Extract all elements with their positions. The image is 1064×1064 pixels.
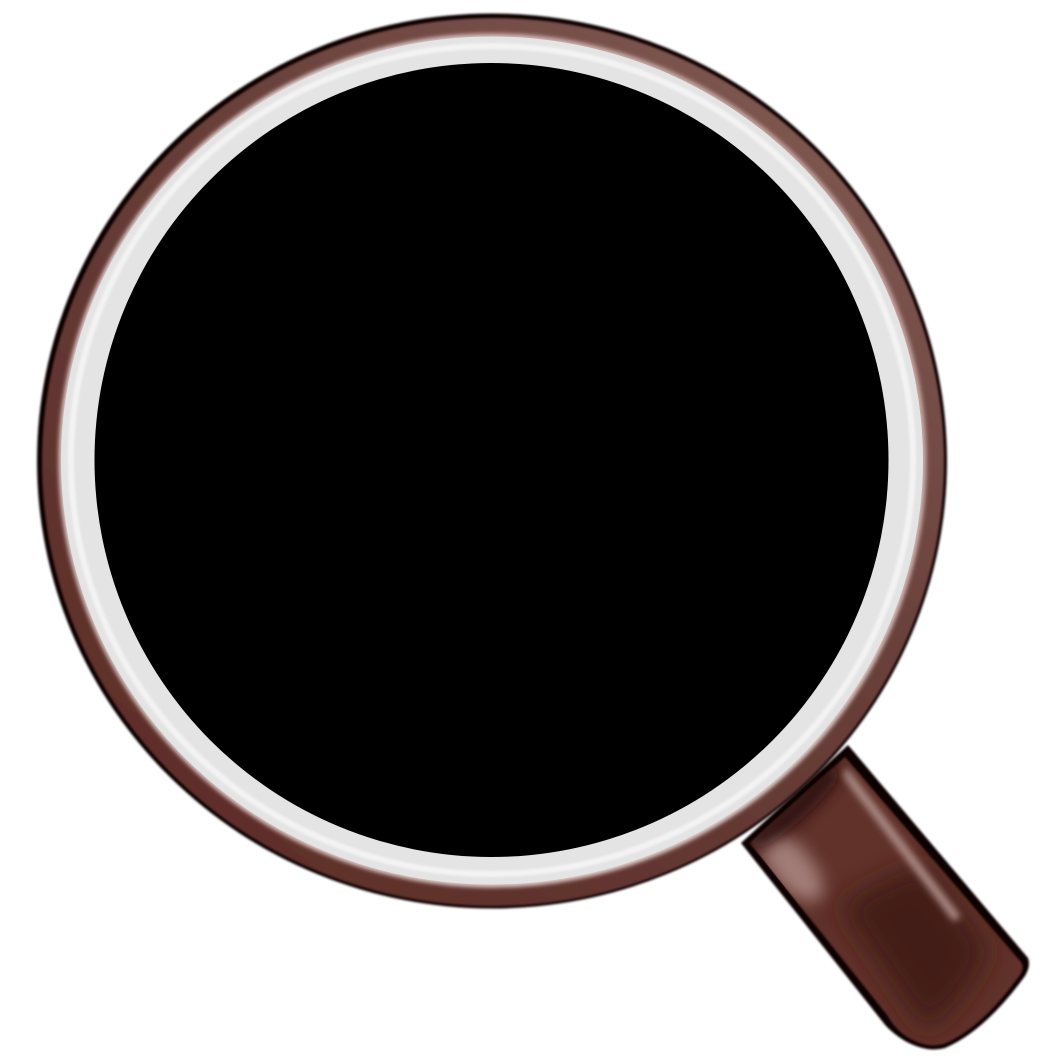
- handle left highlight: [753, 830, 832, 910]
- shadow under the rim: [752, 768, 834, 842]
- white inner lip: [61, 36, 923, 884]
- handle dark lower shading: [838, 862, 990, 1032]
- rim brown band: [42, 18, 944, 906]
- coffee surface: [94, 63, 888, 857]
- rim pale transition: [58, 34, 926, 888]
- lip highlight: [71, 46, 913, 874]
- mug handle: [741, 745, 1029, 1049]
- rim outer dark edge: [37, 14, 947, 908]
- handle body: [750, 757, 1023, 1045]
- mug rim: [37, 14, 947, 908]
- handle right highlight: [846, 774, 955, 916]
- handle outline: [741, 745, 1029, 1049]
